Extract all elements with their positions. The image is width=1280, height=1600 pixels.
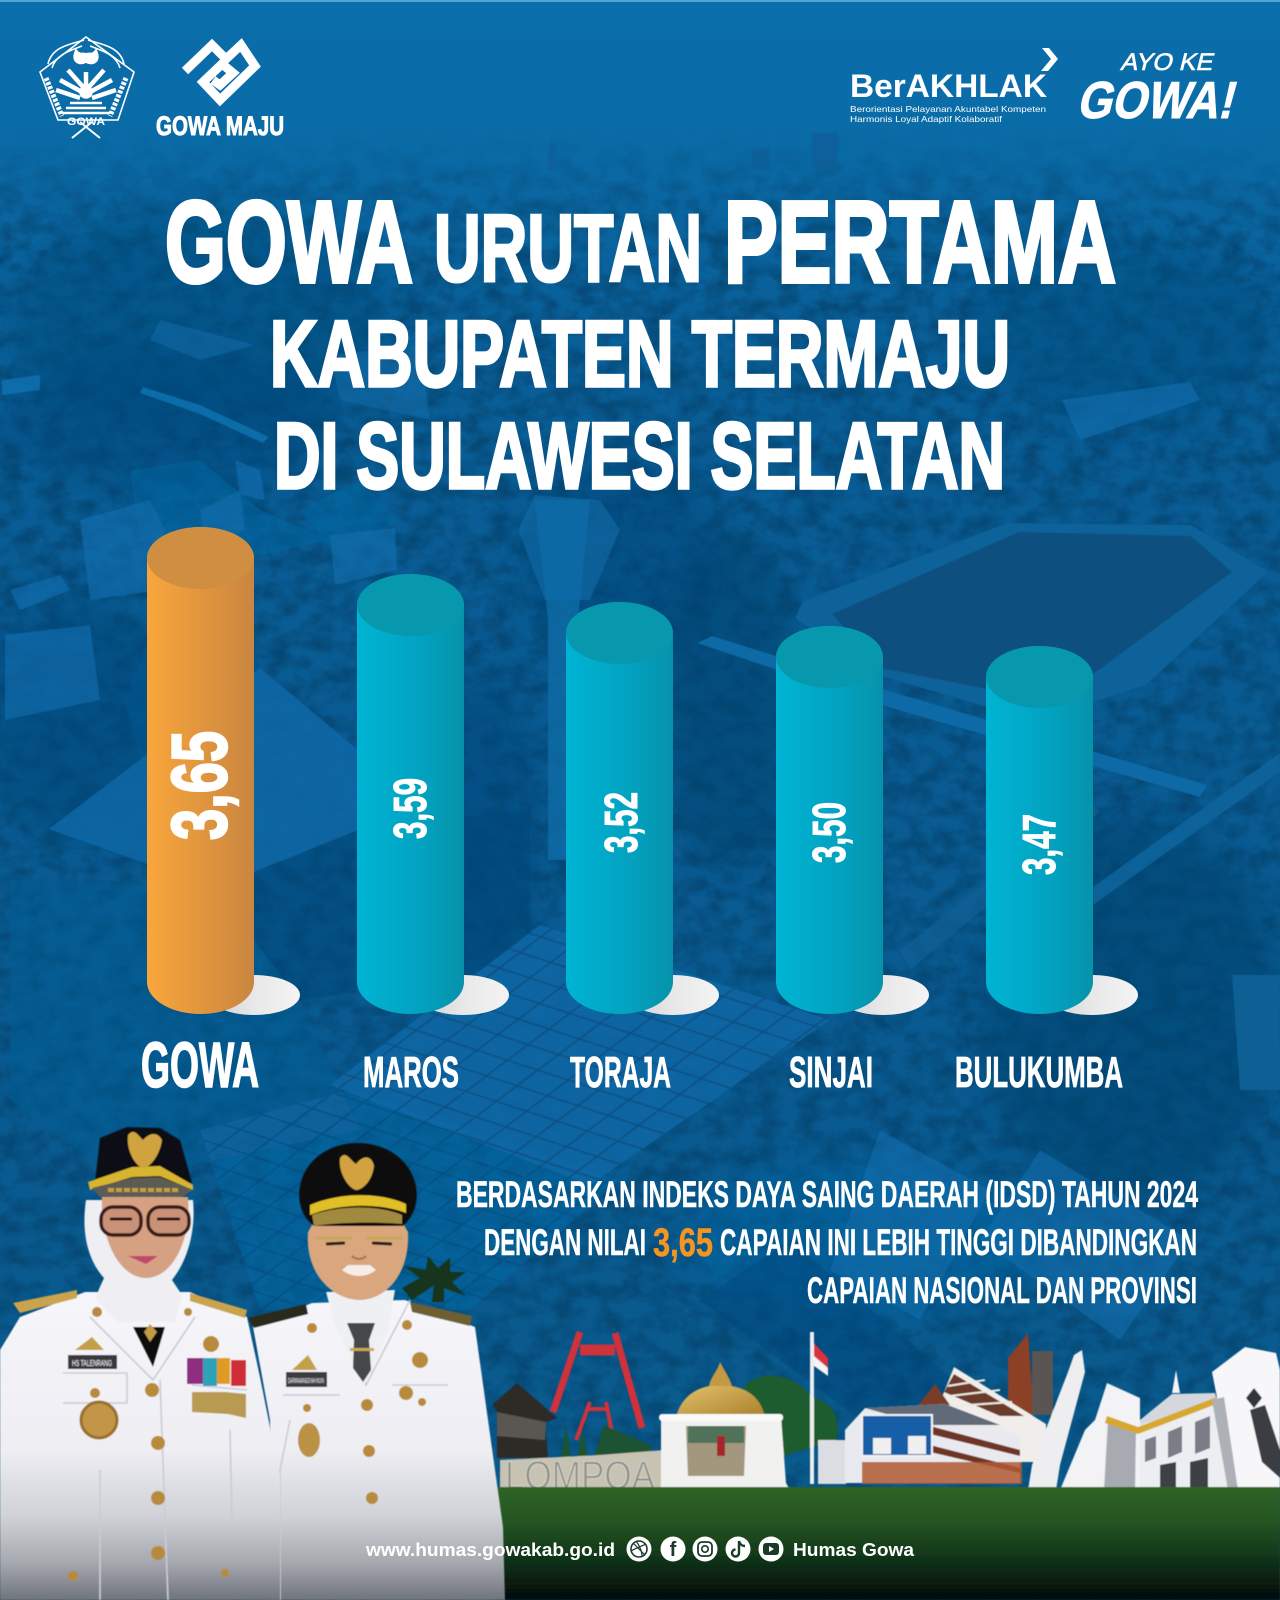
bar: Sinjai 3,50 (776, 626, 929, 1015)
logo: Gowa regency crest (40, 37, 134, 138)
woman hijab and face (84, 1200, 194, 1322)
title: PERTAMA (724, 177, 1116, 307)
logo: Ayo ke Gowa: AYO KE (1119, 49, 1217, 76)
small buildings (818, 1440, 846, 1484)
bar: Toraja 3,52: 3,52 (595, 792, 647, 853)
bar: Maros 3,59: 3,59 (384, 778, 436, 839)
text block: IDSD description: DENGAN NILAI (484, 1222, 646, 1263)
bar: Gowa 3,65 (147, 527, 300, 1015)
footer: website and social links (365, 1536, 915, 1562)
icon: youtube (758, 1536, 784, 1562)
man cap (299, 1143, 417, 1226)
stadium (795, 523, 1268, 706)
title: GOWA (165, 177, 413, 307)
red bridge (553, 1332, 642, 1440)
man shirt and tie (326, 1290, 395, 1385)
category labels: TORAJA (570, 1048, 671, 1097)
category labels (141, 1029, 1123, 1101)
man face (308, 1225, 408, 1300)
landmarks skyline (402, 1256, 1280, 1600)
footer: website and social links: Humas Gowa (793, 1539, 915, 1560)
logo: BerAKHLAK: Berorientasi Pelayanan Akuntabel Kompeten (850, 104, 1046, 114)
woman uniform (0, 1292, 280, 1600)
title: URUTAN (434, 195, 702, 302)
woman insignia (68, 1355, 117, 1369)
icon: tiktok (726, 1536, 750, 1562)
golden dome pavilion (659, 1362, 790, 1490)
flag and pole (810, 1332, 828, 1484)
palm tree (402, 1256, 466, 1302)
tower building (1008, 1333, 1053, 1415)
trees (745, 1375, 838, 1460)
logo: BerAKHLAK (850, 48, 1058, 124)
photo: vice regent figure (woman): HS TALENRANG (72, 1359, 112, 1368)
category labels: GOWA (141, 1029, 259, 1101)
title (165, 177, 1116, 508)
central tower (535, 500, 590, 860)
near buildings left (2, 375, 40, 395)
logo: Gowa Maju: GOWA MAJU (156, 111, 284, 141)
Lompoa wall and sign: LOMPOA (505, 1454, 655, 1498)
horizon towers (548, 133, 838, 170)
traditional house (493, 1383, 557, 1458)
icon: dribbble (626, 1536, 652, 1562)
bar chart (141, 527, 1138, 1101)
plaza grid (330, 925, 830, 1185)
logo: Ayo ke Gowa (1073, 49, 1244, 130)
logo: BerAKHLAK: Harmonis Loyal Adaptif Kolaboratif (850, 114, 1003, 124)
bar: Sinjai 3,50: 3,50 (803, 802, 855, 863)
footer: website and social links: www.humas.gowakab.go.id (365, 1539, 615, 1560)
rice field (495, 1487, 1280, 1600)
big roof left (49, 668, 358, 888)
photo: regent figure (man) (248, 1143, 505, 1600)
icon: facebook: f (670, 1539, 677, 1561)
woman cap (95, 1127, 192, 1183)
bar: Toraja 3,52 (566, 602, 719, 1015)
bar: Maros 3,59 (357, 574, 509, 1015)
category labels: BULUKUMBA (955, 1048, 1123, 1097)
bar: Gowa 3,65: 3,65 (155, 731, 243, 840)
man insignia (286, 1372, 327, 1387)
government office building (845, 1367, 1046, 1484)
bar: Bulukumba 3,47 (986, 646, 1138, 1015)
category labels: SINJAI (789, 1048, 873, 1097)
icon: facebook (660, 1536, 686, 1562)
logo: Gowa Maju (156, 45, 284, 141)
bar: Bulukumba 3,47: 3,47 (1013, 814, 1065, 875)
text block: IDSD description: 3,65 (653, 1221, 713, 1265)
logo: Gowa regency crest: GOWA (67, 116, 105, 128)
logo: Ayo ke Gowa: GOWA! (1073, 72, 1244, 130)
text block: IDSD description (456, 1174, 1198, 1311)
mosque (1028, 1347, 1280, 1490)
lower buildings (830, 1130, 1190, 1340)
category labels: MAROS (363, 1048, 459, 1097)
photo: vice regent figure (woman) (0, 1127, 280, 1600)
logo: BerAKHLAK: BerAKHLAK (850, 68, 1047, 104)
man uniform (253, 1300, 505, 1600)
photo: regent figure (man): DARMAWANGSYAH MUIN (288, 1378, 324, 1385)
icon: instagram (692, 1536, 718, 1562)
